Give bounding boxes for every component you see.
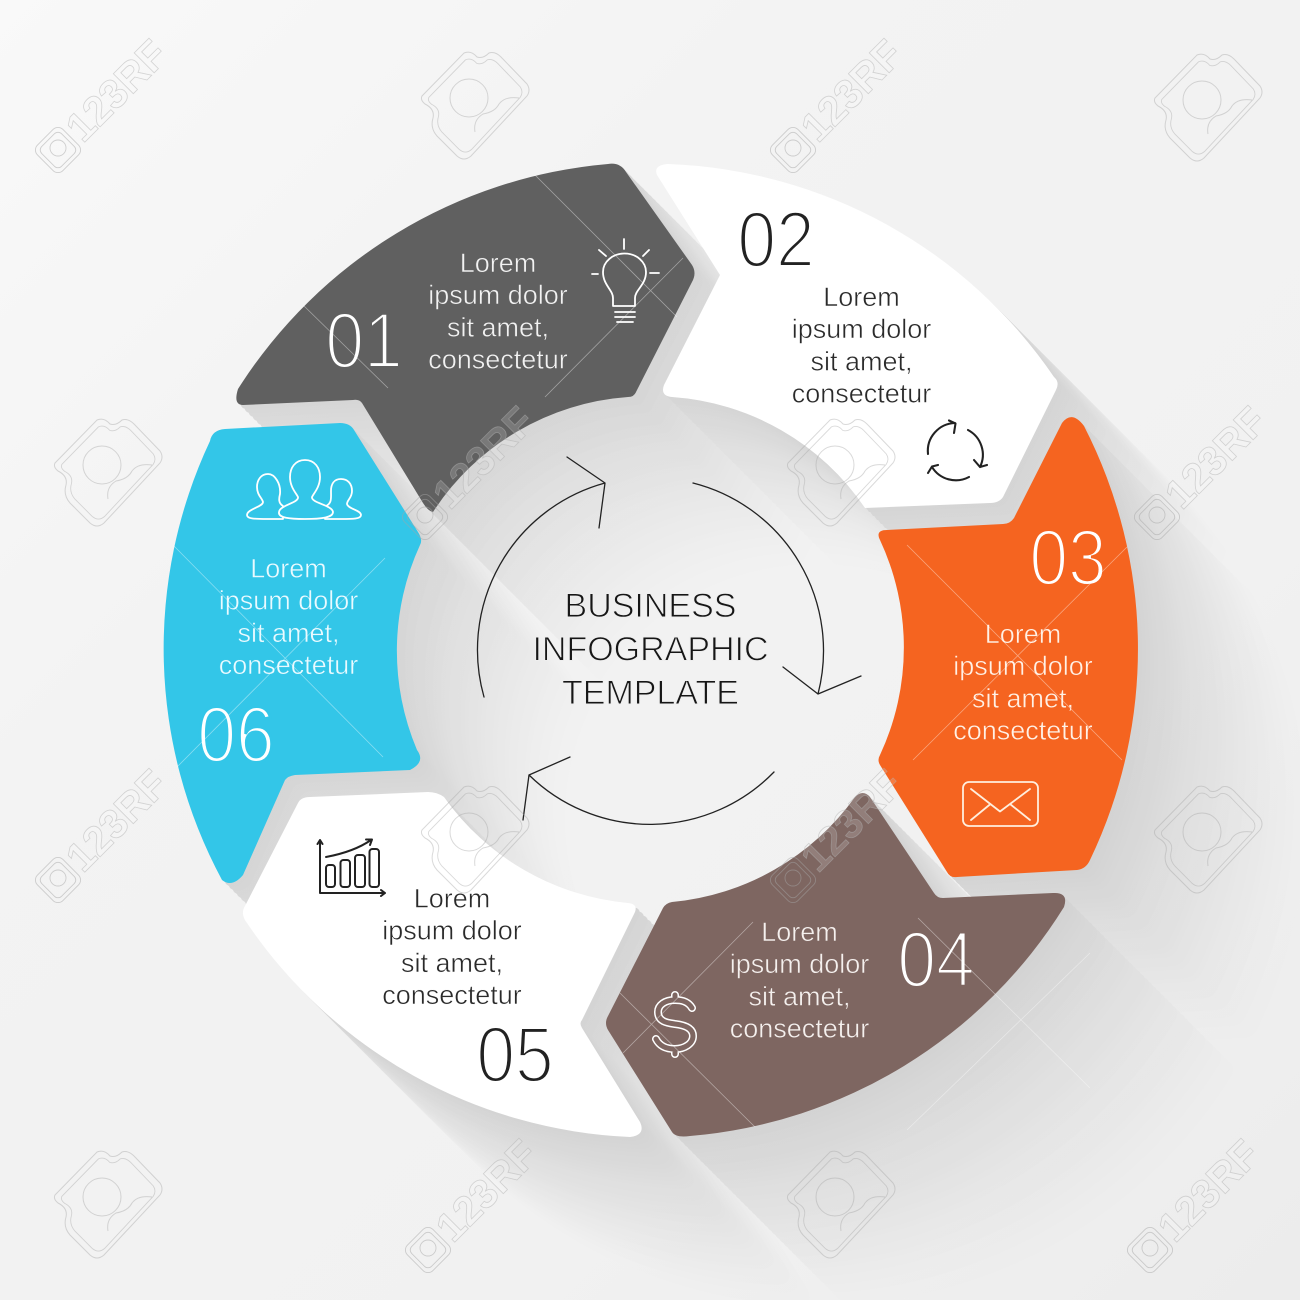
text block 04: sit amet, xyxy=(748,982,851,1012)
text block 01: Lorem xyxy=(460,248,536,278)
text block 01: ipsum dolor xyxy=(428,280,568,310)
watermark overlay: 123RF xyxy=(57,31,176,150)
title: INFOGRAPHIC xyxy=(532,630,769,668)
long cast shadow of the ring xyxy=(168,168,1300,1300)
number 03: 03 xyxy=(1029,513,1107,601)
text block 04: consectetur xyxy=(730,1014,869,1044)
number 02: 02 xyxy=(737,195,815,283)
text block 06: ipsum dolor xyxy=(219,586,358,616)
text block 04: Lorem xyxy=(761,917,838,947)
watermark overlay: 123RF xyxy=(792,761,911,880)
watermark overlay: 123RF xyxy=(1149,1131,1268,1250)
text block 05: ipsum dolor xyxy=(382,916,522,946)
watermark overlay: 123RF xyxy=(792,31,911,150)
centre cycle arrows xyxy=(477,457,861,824)
number 05: 05 xyxy=(476,1010,554,1098)
watermark overlay: 123RF xyxy=(427,1131,546,1250)
text block 05: Lorem xyxy=(414,884,490,914)
text block 03: consectetur xyxy=(953,716,1093,746)
watermark overlay: 123RF xyxy=(424,398,543,517)
text block 06: sit amet, xyxy=(237,618,340,648)
text block 05: sit amet, xyxy=(401,948,503,978)
number 04: 04 xyxy=(897,915,975,1003)
panel: segment 03 xyxy=(878,417,1138,877)
watermark overlay: 123RF xyxy=(1156,398,1275,517)
panel: segment 06 xyxy=(164,423,421,883)
panel: segment 04 xyxy=(606,793,1065,1136)
text block 06: consectetur xyxy=(219,650,358,680)
text block 02: sit amet, xyxy=(810,346,913,376)
text block 03: sit amet, xyxy=(972,684,1074,714)
text block 02: ipsum dolor xyxy=(792,314,931,344)
watermark overlay: 123RF xyxy=(57,761,176,880)
text block 03: ipsum dolor xyxy=(953,651,1093,681)
text block 02: Lorem xyxy=(823,282,900,312)
text block 06: Lorem xyxy=(250,554,327,584)
icon: light bulb xyxy=(592,239,659,322)
panel: segment 01 xyxy=(236,164,695,512)
text block 04: ipsum dolor xyxy=(730,949,869,979)
text block 03: Lorem xyxy=(985,619,1061,649)
text block 01: consectetur xyxy=(428,344,568,374)
icon: recycle arrows xyxy=(928,420,987,480)
icon: dollar sign xyxy=(656,995,693,1054)
text block 05: consectetur xyxy=(382,980,522,1010)
icon: bar chart with trend arrow xyxy=(318,840,385,896)
number 06: 06 xyxy=(197,690,275,778)
panel: segment 05 xyxy=(243,792,642,1137)
text block 01: sit amet, xyxy=(447,312,549,342)
title: BUSINESS xyxy=(565,587,736,625)
number 01: 01 xyxy=(325,296,403,384)
panel: segment 02 xyxy=(656,164,1058,508)
icon: group of people xyxy=(247,460,361,519)
title: TEMPLATE xyxy=(562,674,739,712)
text block 02: consectetur xyxy=(792,378,931,408)
icon: envelope xyxy=(963,782,1038,826)
